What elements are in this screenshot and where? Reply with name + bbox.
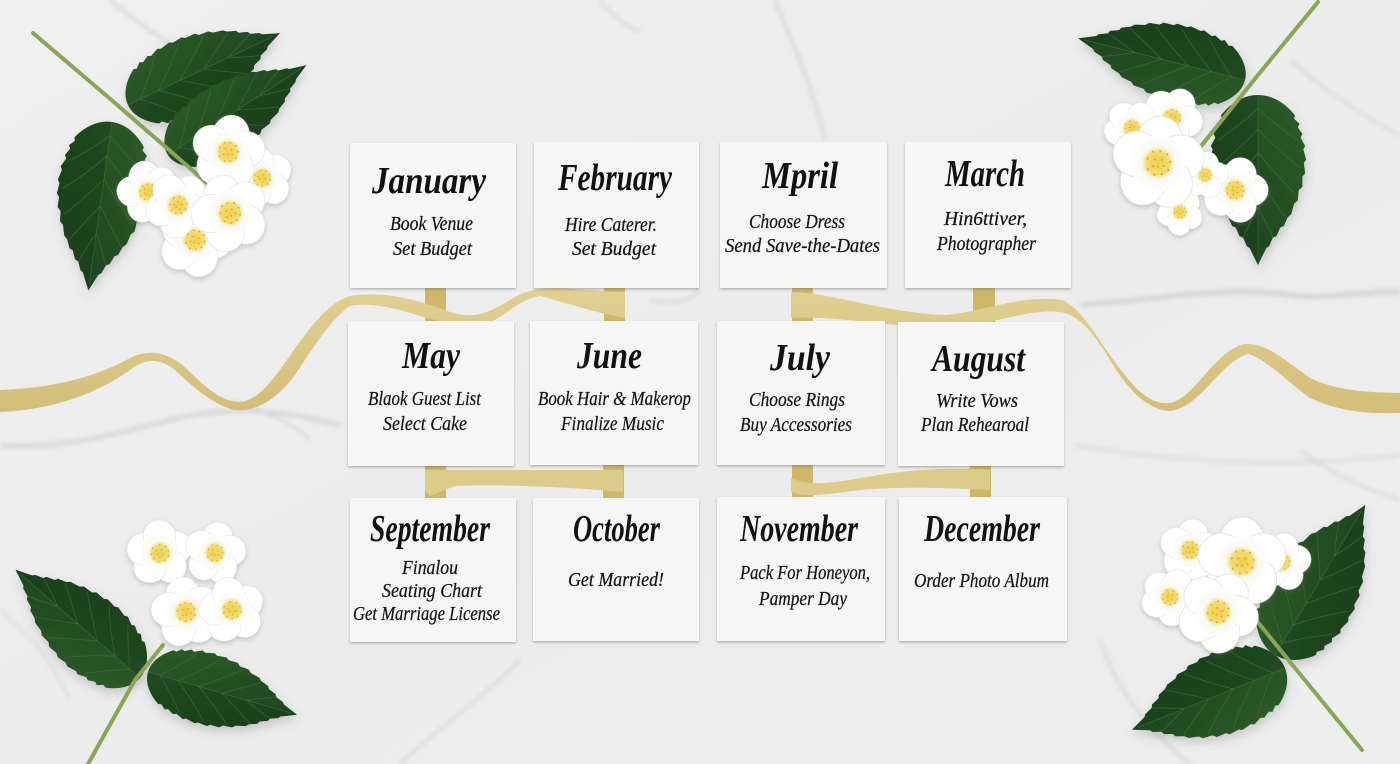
card: June	[530, 321, 698, 465]
card: Mpril: Choose Dress	[749, 211, 845, 233]
card: March: Hin6ttiver,	[943, 208, 1027, 230]
card: February: Hire Caterer.	[564, 214, 657, 236]
sprig: bottom left	[0, 511, 307, 764]
card: October: October	[573, 508, 661, 550]
card: September: September	[370, 508, 491, 550]
card: Mpril	[720, 142, 887, 288]
card: October: Get Married!	[568, 569, 664, 591]
blossoms	[120, 511, 277, 653]
card: July: July	[769, 337, 830, 379]
card: July: Choose Rings	[749, 389, 845, 411]
card: Mpril: Mpril	[761, 155, 838, 197]
card: January	[350, 143, 516, 288]
ribbon: left strand	[0, 288, 625, 412]
card: August: Plan Rehearoal	[920, 414, 1029, 436]
card: May	[348, 321, 514, 466]
card: May: May	[401, 335, 460, 377]
card: January: Set Budget	[393, 238, 472, 260]
card: June: Finalize Music	[560, 413, 664, 435]
sprig: top right	[1069, 1, 1318, 265]
ribbon: right strand	[791, 292, 1400, 413]
card: January: January	[371, 160, 486, 202]
card: September	[350, 498, 516, 642]
card: May: Blaok Guest List	[368, 388, 481, 410]
card: August: August	[930, 338, 1026, 380]
blossoms	[1138, 514, 1316, 665]
sprig: bottom right	[1116, 482, 1400, 764]
card: November: November	[739, 508, 859, 550]
card: June: June	[576, 335, 642, 377]
blossoms	[109, 109, 304, 284]
card: March	[905, 142, 1071, 288]
leaves	[1116, 482, 1400, 764]
card: February	[534, 142, 699, 288]
card: November: Pamper Day	[758, 588, 847, 610]
stem	[33, 33, 215, 190]
blossoms	[1098, 76, 1268, 242]
card: September: Seating Chart	[382, 580, 482, 602]
ribbon: vertical connectors	[425, 286, 995, 500]
card: February: February	[557, 157, 672, 199]
ribbon: lower left band	[425, 470, 623, 496]
card: Mpril: Send Save-the-Dates	[725, 235, 880, 257]
card: December: Order Photo Album	[914, 570, 1049, 592]
card: July	[717, 321, 885, 465]
stem	[1198, 2, 1318, 150]
leaves	[0, 540, 307, 750]
stem	[88, 645, 163, 764]
card: May: Select Cake	[383, 413, 467, 435]
stem	[1252, 615, 1362, 750]
ribbon: lower right band	[791, 469, 990, 495]
card: February: Set Budget	[572, 238, 656, 260]
card: January: Book Venue	[390, 213, 473, 235]
card: November: Pack For Honeyon,	[739, 562, 870, 584]
card: December	[899, 497, 1067, 641]
card: March: Photographer	[936, 233, 1036, 255]
card: August: Write Vows	[936, 390, 1018, 412]
leaves	[43, 0, 325, 297]
card: November	[717, 497, 885, 641]
card: December: December	[923, 508, 1041, 550]
card: March: March	[944, 153, 1025, 195]
leaves	[1069, 1, 1306, 265]
card: September: Get Marriage License	[353, 603, 500, 625]
card: September: Finalou	[401, 557, 458, 579]
card: August	[898, 322, 1064, 466]
card: October	[533, 498, 699, 641]
sprig: top left	[33, 0, 325, 297]
card: June: Book Hair & Makerop	[538, 388, 691, 410]
card: July: Buy Accessories	[740, 414, 852, 436]
